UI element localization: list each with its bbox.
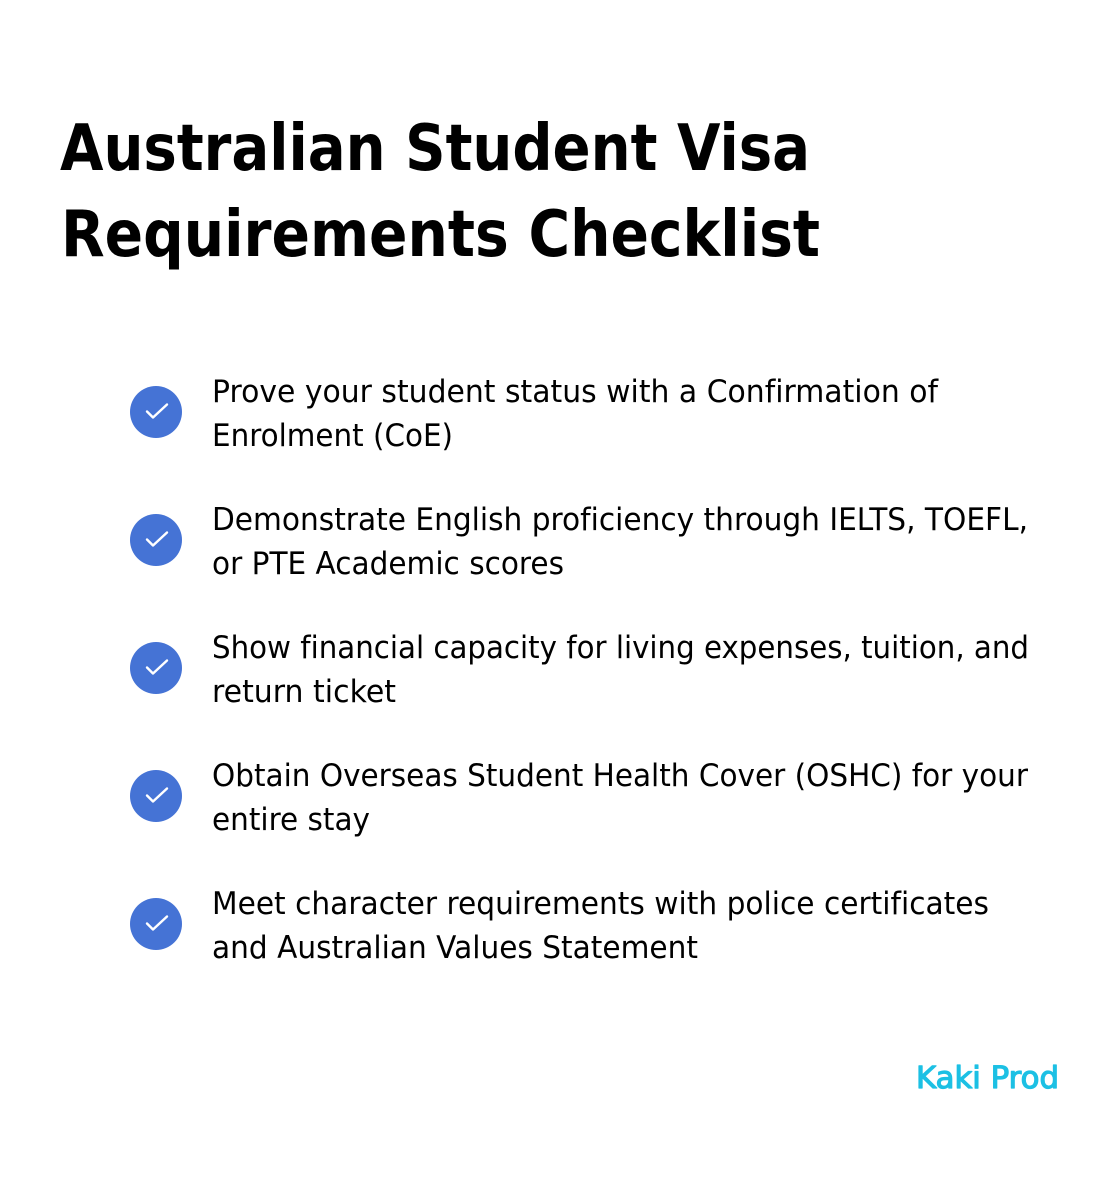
item 4: health cover <box>130 758 1028 838</box>
item 5: character requirements: Meet character requirements with police certificates <box>212 886 989 922</box>
item 1: confirmation of enrolment: Prove your student status with a Confirmation of <box>212 374 939 410</box>
item 5: character requirements: and Australian Values Statement <box>212 930 698 966</box>
item 4: health cover: Obtain Overseas Student Health Cover (OSHC) for your <box>212 758 1028 794</box>
item 3: financial capacity: return ticket <box>212 674 396 710</box>
title: Australian Student Visa <box>60 112 810 186</box>
item 3: financial capacity: Show financial capacity for living expenses, tuition, and <box>212 630 1029 666</box>
logo: Kaki Prod: Kaki Prod <box>916 1061 1059 1096</box>
item 1: confirmation of enrolment: Enrolment (CoE) <box>212 418 453 454</box>
checklist <box>130 374 1029 966</box>
item 2: English proficiency: Demonstrate English proficiency through IELTS, TOEFL, <box>212 502 1028 538</box>
title: Requirements Checklist <box>61 198 820 272</box>
item 2: English proficiency <box>130 502 1028 582</box>
item 1: confirmation of enrolment <box>130 374 939 454</box>
item 2: English proficiency: or PTE Academic scores <box>212 546 564 582</box>
item 5: character requirements <box>130 886 989 966</box>
title <box>60 112 820 272</box>
item 3: financial capacity <box>130 630 1029 710</box>
item 4: health cover: entire stay <box>212 802 370 838</box>
